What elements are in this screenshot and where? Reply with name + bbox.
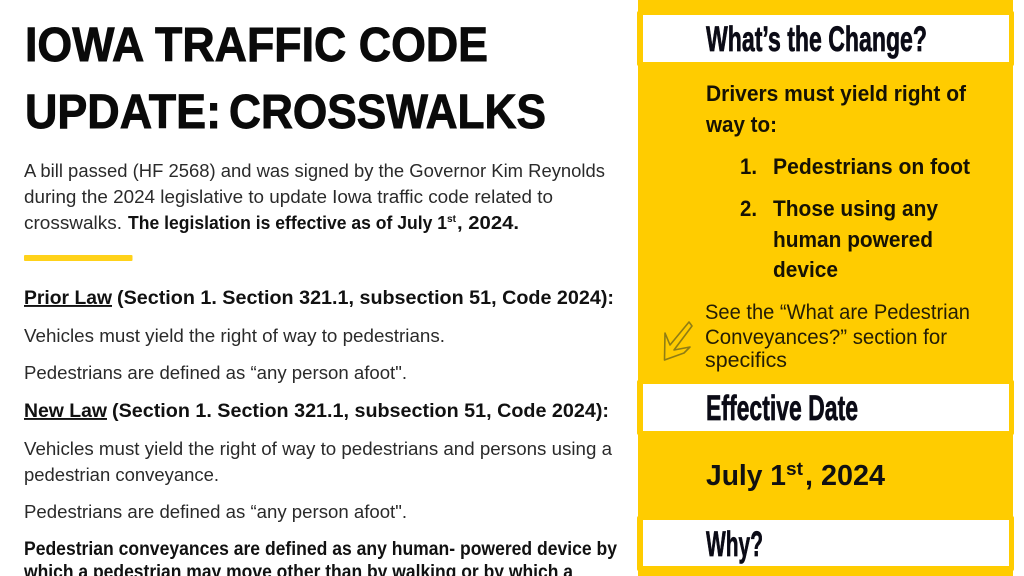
yellow divider [24, 255, 132, 261]
change summary: human powered [773, 227, 933, 252]
prior law text: Pedestrians are defined as “any person afoot". [24, 363, 407, 383]
new law heading: (Section 1. Section 321.1, subsection 51, Code 2024): [112, 401, 609, 422]
change summary: 2. [740, 196, 757, 221]
change summary: device [773, 257, 838, 282]
section reference note: specifics [705, 348, 787, 372]
heading band: why [637, 516, 1014, 571]
new law text: pedestrian conveyance. [24, 465, 219, 485]
panel: summary sidebar [637, 0, 1014, 576]
effective date value [706, 459, 885, 492]
new law text [24, 439, 613, 522]
heading band: effective date [637, 380, 1014, 435]
section reference note: See the “What are Pedestrian [705, 300, 970, 324]
intro paragraph: The legislation is effective as of July 1 [128, 213, 447, 233]
intro paragraph: A bill passed (HF 2568) and was signed by the Governor Kim Reynolds [24, 161, 605, 181]
heading band: effective date: Effective Date [706, 389, 858, 428]
title: IOWA TRAFFIC CODE [25, 19, 488, 72]
intro paragraph: crosswalks. [24, 213, 122, 233]
heading band: what's the change [637, 11, 1014, 66]
change summary: Those using any [773, 196, 938, 221]
effective date value: July 1 [706, 460, 786, 492]
new law text: Pedestrians are defined as “any person afoot". [24, 502, 407, 522]
change summary [705, 81, 970, 282]
effective date value: st [786, 459, 803, 479]
title: CROSSWALKS [229, 86, 546, 139]
new law heading: New Law [24, 401, 107, 422]
heading band: why: Why? [706, 525, 763, 564]
change summary: 1. [740, 154, 757, 179]
title [25, 19, 546, 139]
intro paragraph: , 2024. [457, 213, 519, 233]
title: UPDATE: [25, 86, 221, 139]
section reference note: Conveyances?” section for [705, 325, 947, 349]
prior law text [24, 326, 445, 383]
section reference note [705, 300, 970, 372]
prior law heading: (Section 1. Section 321.1, subsection 51, Code 2024): [117, 288, 614, 309]
intro paragraph [24, 161, 605, 233]
prior law text: Vehicles must yield the right of way to pedestrians. [24, 326, 445, 346]
intro paragraph: st [447, 213, 456, 225]
prior law heading: Prior Law [24, 288, 112, 309]
change summary: Pedestrians on foot [773, 154, 970, 179]
change summary: way to: [705, 112, 777, 137]
intro paragraph: during the 2024 legislative to update Iowa traffic code related to [24, 187, 553, 207]
change summary: Drivers must yield right of [706, 81, 966, 106]
pedestrian conveyance definition: Pedestrian conveyances are defined as any human- powered device by [24, 539, 617, 560]
icon: arrow [664, 322, 692, 360]
pedestrian conveyance definition [23, 539, 617, 576]
new law text: Vehicles must yield the right of way to pedestrians and persons using a [24, 439, 613, 459]
effective date value: , 2024 [805, 460, 885, 492]
